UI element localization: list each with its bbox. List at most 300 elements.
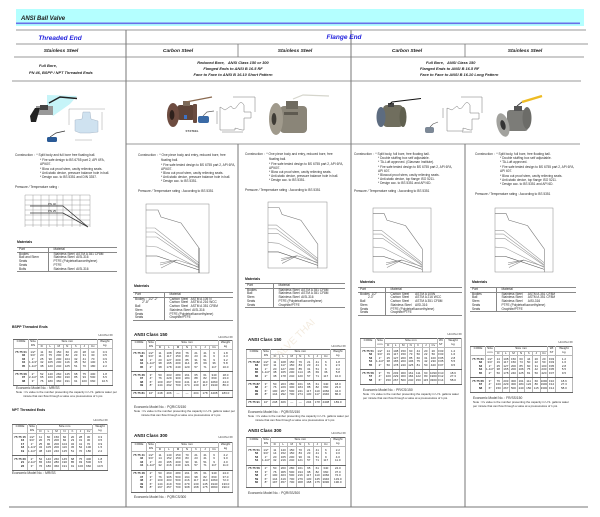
dimension table: ANSI 150 stainless: 36	[324, 370, 327, 374]
dimension table: ANSI 150 stainless: 240	[289, 374, 294, 378]
dimension table: ANSI 150 carbon: 76	[158, 376, 162, 380]
dimension table: ANSI 300 stainless: 53	[255, 455, 258, 459]
dimension table: NPT: 1.8	[98, 457, 102, 461]
dimension table: ANSI 300 stainless: 700	[289, 480, 294, 484]
dimension table: ANSI 150 carbon: 200	[175, 361, 180, 365]
dimension table: ANSI 300 stainless: 2"	[265, 466, 267, 470]
dimension table: ANSI 150 carbon: 61	[203, 373, 207, 377]
dimension table: ANSI 150 carbon: DN	[149, 344, 153, 348]
dimension table: ANSI 300 stainless: 280	[289, 466, 294, 470]
dimension table: stainless full bore: 4"	[489, 382, 491, 386]
dimension table: carbon full bore: 9.5	[451, 363, 455, 367]
dimension table: stainless full bore: 122	[526, 382, 531, 386]
dimension table: carbon full bore: ST	[439, 342, 443, 346]
dimension table: ANSI 150 carbon: 1"	[150, 358, 152, 362]
material heading: stainless threaded: Stainless Steel	[44, 48, 79, 54]
dimension table: ANSI 150 carbon: 10"	[149, 391, 153, 395]
dimension table: NPT: 52	[39, 457, 42, 461]
construction: threaded: * Anti-static device, pressure balance hole in ball.	[40, 171, 109, 175]
icon: carbon steel reduced valve	[167, 97, 212, 127]
dimension table: ANSI 150 stainless: 130	[306, 392, 311, 396]
dimension table: ANSI 300 stainless: 4"	[265, 473, 267, 477]
dimension table: ANSI 150 carbon: —	[186, 391, 188, 395]
dimension table: ANSI 150 carbon: 204	[193, 391, 198, 395]
materials table: threaded: Stainless Steel AISI-316	[54, 255, 89, 259]
dimension table: NPT: 60	[47, 435, 50, 439]
dimension table: stainless full bore: 19	[497, 360, 500, 364]
materials table: carbon reduced: PTFE (Polytetrafluoroethylene)	[170, 312, 213, 316]
dimension table: ANSI 150 stainless: 83	[299, 363, 302, 367]
dimension table: NPT: 2"	[31, 457, 33, 461]
dimension table: stainless full bore: 50	[535, 371, 538, 375]
unit: ANSI 300 carbon: Unit Per Pc	[218, 435, 234, 439]
dimension table: ANSI 150 stainless: 71	[316, 374, 319, 378]
dimension table: carbon full bore: 6"	[379, 378, 381, 382]
dimension table: NPT: 22	[21, 464, 24, 468]
dimension table: carbon full bore: 229	[393, 374, 398, 378]
dimension table: stainless full bore: 2.8	[562, 364, 566, 368]
dimension table: ANSI 150 stainless: 274	[298, 392, 303, 396]
dimension table: ANSI 150 carbon: 6	[213, 351, 215, 355]
construction: carbon reduced: floating ball.	[161, 158, 178, 162]
dimension table: stainless full bore: 1090	[541, 379, 547, 383]
dimension table: NPT: 91	[71, 464, 74, 468]
dimension table: NPT: 60	[63, 435, 66, 439]
dimension table: stainless full bore: 5.5	[562, 367, 566, 371]
dimension table: stainless full bore: 1/2"	[487, 357, 493, 361]
construction: carbon full bore: API 607.	[378, 169, 390, 173]
dimension table: ANSI 300 stainless: 500	[289, 473, 294, 477]
dimension table: carbon full bore: 100	[386, 374, 391, 378]
dimension table: ANSI 150 stainless: 660	[323, 385, 328, 389]
dimension table: ANSI 150 carbon: 700	[175, 383, 180, 387]
dimension table: ANSI 300 stainless: 71	[316, 458, 319, 462]
dimension table: ANSI 150 stainless: 161	[298, 382, 303, 386]
dimension table: ANSI 150 stainless: 117	[315, 392, 320, 396]
dimension table: ANSI 150 carbon: 130	[193, 383, 198, 387]
dimension table: BSPP: 11	[40, 350, 43, 354]
dimension table: ANSI 150 carbon: 75 75 36	[133, 373, 145, 377]
dimension table: carbon full bore: 42	[424, 359, 427, 363]
pressure label: stainless reduced: Pressure / Temperature rating : According to BS 5351	[245, 188, 321, 192]
dimension table: ANSI 150 carbon: 85	[185, 358, 189, 362]
dimension table: ANSI 150 carbon: 38	[158, 361, 162, 365]
dimension table: stainless full bore: 44	[527, 357, 530, 361]
dimension table: NPT: 90	[47, 442, 50, 446]
dimension table: BSPP: 75	[83, 372, 86, 376]
dimension table: ANSI 300 stainless: 500	[289, 470, 294, 474]
dimension table: ANSI 150 carbon: 31	[194, 358, 198, 362]
dimension table: ANSI 150 stainless: 65	[307, 382, 310, 386]
dimension table: BSPP: 0.5	[103, 353, 107, 357]
dimension table: BSPP: 125	[65, 364, 70, 368]
dimension table: ANSI 300 carbon: 700	[175, 485, 180, 489]
dimension table: NPT: 120	[46, 449, 51, 453]
dimension table: ANSI 150 carbon: 660	[212, 376, 217, 380]
dimension table: NPT: 116	[62, 445, 67, 449]
dimension table: stainless full bore: 300	[511, 382, 516, 386]
dimension table: carbon full bore: 150	[416, 378, 421, 382]
spec: full bore: Face to Face to ANSI B 16.10 Long Pattern	[420, 72, 499, 77]
icon: carbon full dimension drawing	[443, 97, 482, 132]
heading: ANSI class 150 carbon: ANSI Class 150	[134, 332, 168, 337]
construction: threaded: * Design acc. to BS 5351 and DIN 3357.	[40, 175, 97, 179]
dimension table: stainless full bore: 60	[527, 364, 530, 368]
dimension table: ANSI 300 stainless: 50	[273, 466, 276, 470]
construction: carbon full bore: * Fire safe tested design to BS 6755 part 2, API 6FA,	[378, 165, 452, 169]
materials table: stainless reduced: Material	[278, 283, 290, 287]
dimension table: ANSI 150 carbon: 150	[175, 351, 180, 355]
dimension table: ANSI 150 stainless: 45	[307, 370, 310, 374]
dimension table: stainless full bore: 1.2	[562, 357, 566, 361]
dimension table: BSPP: 200	[56, 357, 61, 361]
dimension table: carbon full bore: 73	[409, 352, 412, 356]
dimension table: stainless full bore: 20	[535, 357, 538, 361]
dimension table: ANSI 300 carbon: 11	[158, 453, 162, 457]
dimension table: ANSI 150 carbon: 280	[175, 373, 180, 377]
materials table: carbon full bore: Carbon Steel ASTM A 105N	[390, 292, 435, 296]
materials table: stainless full bore: PTFE (Polytetrafluoroethylene)	[502, 303, 545, 307]
materials table: stainless reduced	[245, 283, 345, 308]
dimension table: stainless full bore: 2"	[489, 371, 491, 375]
chart: carbon reduced	[146, 204, 209, 273]
dimension table: ANSI 300 carbon: 194	[184, 475, 190, 479]
dimension table: ANSI 150 carbon: 161	[184, 373, 190, 377]
dimension table: ANSI 300 stainless: kg	[336, 441, 339, 445]
dimension table: ANSI 300 carbon: 6"	[150, 482, 152, 486]
dimension table: stainless full bore: 50	[527, 360, 530, 364]
spec: reduced bore: Flanged Ends to ANSI B 16.5 RF	[203, 66, 263, 71]
dimension table: ANSI 150 stainless: 340	[323, 382, 328, 386]
construction: stainless full bore: Construction : * Split body, full bore, free floating ball.	[475, 152, 551, 156]
dimension table: ANSI 150 carbon: 41	[203, 354, 207, 358]
dimension table: carbon full bore: mm	[378, 342, 382, 346]
dimension table: NPT: 2-1/2"	[28, 460, 36, 464]
dimension table: ANSI 150 stainless: —	[299, 400, 302, 404]
construction: stainless reduced: API607.	[269, 166, 280, 170]
dimension table: stainless full bore: 184	[519, 382, 524, 386]
dimension table: BSPP: 82	[66, 353, 69, 357]
dimension table: ANSI 150 carbon: 1-1/2"	[147, 361, 155, 365]
dimension table: ANSI 150 stainless: 2.3	[336, 363, 340, 367]
dimension table: ANSI 300 carbon: 48	[140, 478, 143, 482]
dimension table: ANSI 150 stainless: 8"	[265, 392, 267, 396]
dimension table: BSPP: 20	[40, 353, 43, 357]
dimension table: ANSI 300 carbon: 24.0	[223, 471, 228, 475]
dimension table: ANSI 300 carbon: 200	[175, 460, 180, 464]
dimension table: carbon full bore: 125	[408, 363, 413, 367]
dimension table: ANSI 300 carbon: 14	[158, 456, 162, 460]
dimension table: NPT: 75	[47, 438, 50, 442]
dimension table: carbon full bore: 200	[401, 359, 406, 363]
dimension table: stainless full bore: 127	[503, 364, 508, 368]
dimension table: ANSI 300 stainless: 1"	[265, 455, 267, 459]
note: ANSI 150 carbon: minute that can flow through a valve at a pressureloss of 1 psi.	[141, 413, 221, 417]
dimension table: carbon full bore: 20	[424, 349, 427, 353]
dimension table: BSPP: 360	[56, 379, 61, 383]
dimension table: NPT: 70	[79, 449, 82, 453]
dimension table: BSPP: 240	[56, 364, 61, 368]
dimension table: ANSI 300 carbon: 32	[158, 463, 162, 467]
dimension table: carbon full bore: 1900	[430, 374, 437, 378]
dimension table: NPT: 200	[54, 445, 59, 449]
dimension table: ANSI 300 carbon: 168	[193, 485, 198, 489]
dimension table: ANSI 300 carbon: 83	[185, 456, 189, 460]
dimension table: ANSI 150 stainless: kg	[336, 353, 339, 357]
dimension table: stainless full bore: 200	[511, 364, 516, 368]
pressure label: carbon reduced: Pressure / Temperature rating : According to BS 5351	[138, 189, 214, 193]
materials table: stainless full bore: Bodies	[472, 292, 482, 296]
dimension table: BSPP: 280	[56, 375, 61, 379]
dimension table: BSPP: 02	[22, 353, 25, 357]
heading: materials stainless reduced: Materials	[245, 277, 260, 281]
dimension table: NPT: 45	[71, 445, 74, 449]
dimension table: ANSI 150 carbon: 178	[202, 391, 208, 395]
watermark: VALVE THAI	[270, 317, 318, 365]
heading: ANSI class 300 stainless: ANSI Class 300	[248, 428, 282, 433]
dimension table: ANSI 300 carbon: 4"	[150, 478, 152, 482]
dimension table: ANSI 300 stainless: 121	[298, 458, 303, 462]
dimension table: stainless full bore: 125	[519, 371, 524, 375]
dimension table: ANSI 300 stainless: 1/2"	[263, 448, 269, 452]
materials table: stainless reduced: Ball	[247, 291, 252, 295]
dimension table: stainless full bore: 165	[503, 367, 508, 371]
dimension table: ANSI 300 stainless: 21	[307, 448, 310, 452]
dimension table: stainless full bore: F14	[549, 386, 554, 390]
dimension table: ANSI 150 stainless: 11	[273, 363, 276, 367]
heading: threaded end: Threaded End	[38, 35, 83, 42]
materials table: carbon reduced: Carbon Steel ASTM A 105 N	[170, 297, 212, 301]
dimension table: ANSI 300 stainless: 52	[255, 451, 258, 455]
dimension table: ANSI 150 stainless: 10.0	[335, 374, 341, 378]
dimension table: NPT: kg	[98, 428, 102, 432]
spec: threaded	[29, 63, 93, 75]
dimension table: BSPP: 105	[48, 360, 53, 364]
dimension table: ANSI 300 stainless: 70	[299, 448, 302, 452]
dimension table: stainless full bore: ST	[550, 350, 553, 354]
dimension table: NPT: 180	[86, 449, 91, 453]
materials table: stainless reduced: PTFE (Polytetrafluoroethylene)	[278, 299, 322, 303]
dimension table: stainless full bore: 106	[519, 367, 524, 371]
dimension table: ANSI 150 carbon: 39	[140, 383, 143, 387]
materials table: carbon reduced	[133, 292, 233, 321]
dimension table: ANSI 300 carbon: 117	[212, 463, 216, 467]
dimension table: NPT: 660	[86, 464, 91, 468]
construction: stainless full bore: * Double stuffing box self adjustable.	[500, 156, 552, 160]
materials table: stainless full bore: Stem	[472, 299, 479, 303]
dimension table: stainless full bore: F10	[549, 379, 554, 383]
dimension table: NPT: 105	[46, 445, 51, 449]
materials table: stainless full bore: Ball	[472, 295, 477, 299]
dimension table: carbon full bore: 240	[401, 363, 406, 367]
dimension table: ANSI 150 stainless: 89	[255, 389, 258, 393]
pressure label: carbon full bore: Pressure / Temperature rating : According to BS 5351	[354, 189, 430, 193]
dimension table: ANSI 150 carbon: 5.8	[223, 361, 228, 365]
chart: carbon full bore	[373, 208, 431, 272]
dimension table: ANSI 300 stainless: 90	[299, 455, 302, 459]
dimension table: ANSI 300 stainless: 660	[323, 470, 328, 474]
dimension table: ANSI 150 carbon: 500	[175, 380, 180, 384]
materials table: carbon full bore: Seats	[360, 307, 368, 311]
dimension table: ANSI 300 stainless: 23	[307, 451, 310, 455]
dimension table: ANSI 300 carbon: 31	[194, 460, 198, 464]
dimension table: ANSI 150 stainless: 144	[272, 392, 277, 396]
dimension table: BSPP: 660	[90, 379, 95, 383]
note: carbon full bore: Economic Model No. : PR/CS/150	[363, 388, 413, 392]
construction: stainless full bore: * Anti-static device, top flange ISO 5211.	[500, 178, 557, 182]
dimension table: ANSI 300 carbon: 57	[194, 463, 198, 467]
dimension table: NPT: 1"	[31, 442, 33, 446]
dimension table: stainless full bore: 150	[496, 386, 501, 390]
dimension table: carbon full bore: 184	[408, 374, 413, 378]
dimension table: ANSI 150 carbon: 127	[166, 358, 172, 362]
dimension table: ANSI 300 stainless: 32	[273, 458, 276, 462]
unit: BSPP: Unit Per Pc	[98, 333, 114, 337]
dimension table: ANSI 300 stainless	[246, 437, 346, 488]
dimension table: BSPP: 2.2	[103, 364, 107, 368]
icon: small blue threaded valve	[47, 131, 65, 142]
dimension table: ANSI 150 carbon: 117	[203, 383, 207, 387]
dimension table: ANSI 300 carbon: 1060	[211, 478, 217, 482]
materials table: carbon full bore: Bodies 1/2"	[360, 292, 377, 296]
heading: ANSI class 150 stainless: ANSI Class 150	[248, 337, 282, 342]
dimension table: ANSI 300 stainless: 6"	[265, 477, 267, 481]
dimension table: ANSI 150 carbon: 76	[185, 351, 189, 355]
dimension table: ANSI 300 stainless: 9	[325, 455, 327, 459]
dimension table: stainless full bore: 25	[497, 364, 500, 368]
dimension table: NPT: 280	[54, 460, 59, 464]
dimension table: ANSI 150 carbon: 32	[140, 354, 143, 358]
dimension table: ANSI 150 stainless: 6	[325, 360, 327, 364]
dimension table: BSPP: 160	[48, 375, 53, 379]
dimension table: carbon full bore: 60	[417, 356, 420, 360]
dimension table: stainless full bore: 115	[534, 386, 539, 390]
materials table: carbon full bore: Material	[390, 287, 402, 291]
dimension table: NPT: 360	[54, 464, 59, 468]
dimension table: carbon full bore: 53	[369, 356, 372, 360]
dimension table: NPT: 200	[54, 438, 59, 442]
icon: small gray valve	[425, 122, 438, 133]
dimension table: stainless full bore: 420	[541, 371, 546, 375]
dimension table: ANSI 300 stainless: 37.0	[335, 470, 341, 474]
construction: carbon full bore: * Blowout proof stem, cavity relieving seats.	[378, 173, 440, 177]
dimension table: carbon full bore: F12	[438, 374, 443, 378]
dimension table: ANSI 150 carbon: 1060	[211, 380, 217, 384]
chart: stainless full bore	[495, 208, 553, 272]
dimension table: ANSI 300 stainless: 3/4"	[263, 451, 269, 455]
dimension table: ANSI 300 carbon: 216	[184, 478, 190, 482]
dimension table: NPT: 0.9	[98, 442, 102, 446]
dimension table: carbon full bore: 203	[393, 371, 398, 375]
materials table: carbon reduced: Bodies : 1/2"-2"	[135, 297, 158, 301]
dimension table: carbon full bore: 58.0	[450, 378, 456, 382]
dimension table: ANSI 150 stainless: 75 75 87	[248, 382, 260, 386]
title banner	[16, 9, 584, 26]
materials table: stainless reduced: Bodies	[247, 288, 257, 292]
dimension table: NPT: 85	[71, 460, 74, 464]
dimension table: ANSI 300 carbon: DN	[149, 446, 153, 450]
dimension table: NPT: 18	[21, 445, 24, 449]
dimension table: ANSI 150 stainless: 86.0	[335, 392, 341, 396]
dimension table: stainless full bore: 75	[527, 367, 530, 371]
dimension table: carbon full bore: 22	[424, 352, 427, 356]
materials table: threaded: Seats	[19, 259, 27, 263]
materials table: stainless full bore: Stainless Steel ASTM A 351 CF8M	[502, 292, 555, 296]
materials table: stainless reduced: Graphite/PTFE	[278, 303, 300, 307]
pressure label: stainless full bore: Pressure / Temperature rating : According to BS 5351	[475, 192, 551, 196]
heading: NPT threaded ends: NPT Threaded Ends	[12, 408, 45, 412]
dimension table: BSPP: 51	[74, 364, 77, 368]
dimension table: stainless full bore: 50	[542, 360, 546, 364]
dimension table: stainless full bore: 111	[526, 379, 531, 383]
dimension table: stainless full bore: 9.5	[562, 371, 566, 375]
dimension table: stainless full bore: kg	[562, 350, 566, 354]
spec: reduced bore	[194, 60, 273, 77]
dimension table: ANSI 150 stainless: 117	[323, 374, 328, 378]
dimension table: carbon full bore: 108	[393, 349, 398, 353]
dimension table: ANSI 150 carbon: 33	[140, 358, 143, 362]
dimension table: stainless full bore: 58.0	[561, 386, 567, 390]
dimension table: ANSI 300 carbon: 140	[166, 453, 172, 457]
dimension table: BSPP: 75 75 01	[15, 350, 27, 354]
dimension table: ANSI 300 carbon: 130	[193, 482, 198, 486]
dimension table: ANSI 300 stainless: 133.0	[334, 477, 342, 481]
dimension table: BSPP: 140	[48, 372, 53, 376]
dimension table: ANSI 300 stainless: 6	[325, 448, 327, 452]
unit: stainless full bore: Unit Per Pc	[558, 340, 574, 344]
dimension table: ANSI 150 stainless: 2"	[265, 374, 267, 378]
dimension table: ANSI 300 carbon: 41	[203, 456, 207, 460]
dimension table: BSPP: 32	[40, 360, 43, 364]
dimension table: ANSI 300 stainless: 11.0	[335, 458, 341, 462]
note: ANSI 150 carbon: Note : Cv value is the number presenting the capacity in U.S. gallons water per	[134, 409, 235, 413]
dimension table: ANSI 150 stainless: 75 75 82	[248, 360, 260, 364]
dimension table: stainless full bore: 65	[479, 371, 482, 375]
dimension table: ANSI 300 carbon: 23	[194, 456, 198, 460]
dimension table: stainless full bore: 240	[519, 386, 524, 390]
dimension table: ANSI 300 carbon: 3"	[150, 475, 152, 479]
construction: stainless reduced: Construction : * One piece body and entry, reduced bore, free	[245, 152, 333, 156]
dimension table: ANSI 300 stainless: 150	[289, 448, 294, 452]
dimension table: carbon full bore: 2.8	[451, 356, 455, 360]
materials table: threaded: Material	[54, 247, 65, 251]
dimension table: BSPP: 08	[22, 379, 25, 383]
dimension table: ANSI 150 carbon: 51	[203, 358, 207, 362]
dimension table: ANSI 150 carbon: 82	[203, 376, 207, 380]
materials table: threaded: Ball and Stem	[19, 255, 39, 259]
dimension table: carbon full bore: 178	[393, 363, 398, 367]
dimension table: stainless full bore: 76	[497, 379, 500, 383]
dimension table: BSPP: 3"	[32, 379, 34, 383]
dimension table: ANSI 300 carbon: 175	[202, 485, 208, 489]
dimension table: stainless full bore: 203	[503, 379, 508, 383]
dimension table: stainless full bore: 1-1/2"	[486, 367, 494, 371]
unit: ANSI 150 carbon: Unit Per Pc	[218, 335, 234, 339]
dimension table: ANSI 150 carbon: 267	[166, 380, 172, 384]
dimension table: ANSI 150 stainless: 150	[289, 360, 294, 364]
dimension table: ANSI 150 stainless: DN	[264, 353, 268, 357]
dimension table: BSPP: 04	[22, 360, 25, 364]
dimension table: NPT: 2.2	[98, 449, 102, 453]
dimension table: ANSI 150 carbon: 88	[194, 376, 198, 380]
dimension table: ANSI 150 carbon: 406	[166, 391, 172, 395]
dimension table: ANSI 300 stainless: 57	[255, 470, 258, 474]
dimension table: carbon full bore: F03	[438, 349, 443, 353]
dimension table: NPT: 400	[86, 457, 91, 461]
dimension table: ANSI 150 stainless: 9	[325, 367, 327, 371]
dimension table: ANSI 300 carbon: 20	[158, 460, 162, 464]
dimension table: ANSI 300 carbon: 43	[140, 460, 143, 464]
